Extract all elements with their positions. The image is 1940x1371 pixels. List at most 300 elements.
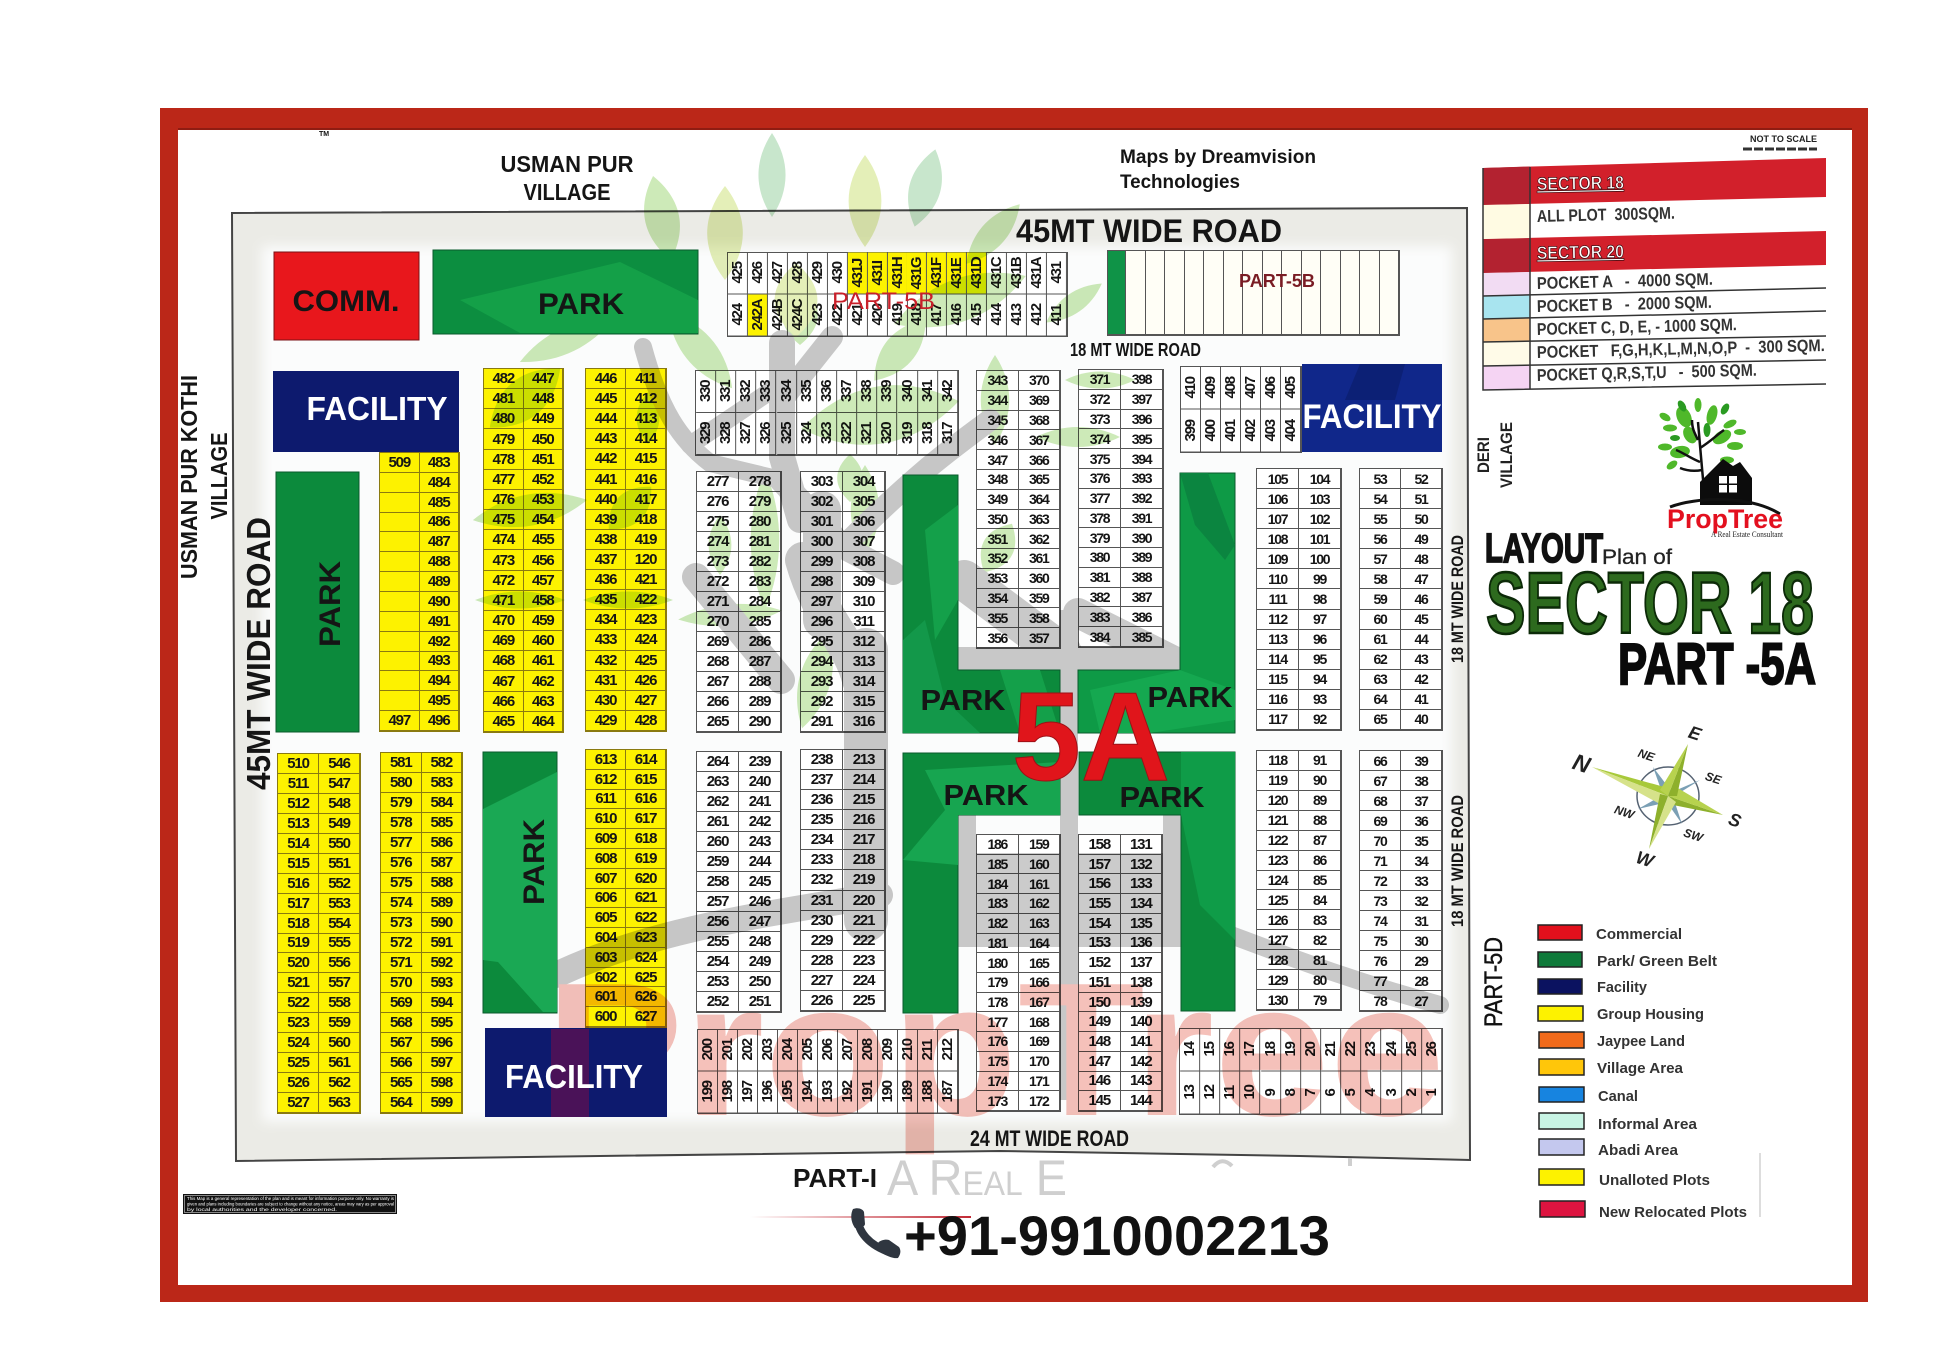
plots 343-370 block: 346 [988, 432, 1007, 448]
plots 424-431 row block: 431B [1008, 258, 1025, 289]
yellow plots 411-446 block: 436 [595, 571, 616, 588]
plots 343-370 block: 351 [988, 531, 1007, 547]
plots 291-316 block: 308 [853, 553, 874, 570]
plots 265-290 block: 271 [707, 593, 728, 610]
yellow plots 564-599 block: 574 [390, 894, 411, 911]
plots 27-78 block: 36 [1414, 812, 1427, 828]
plots 213-238 block: 237 [811, 771, 832, 788]
plots 27-78 block: 66 [1374, 752, 1386, 768]
label: Part-5D: PART-5D [1480, 937, 1508, 1027]
plots 213-238 block: 230 [811, 912, 832, 929]
plots 424-431 row block: 422 [829, 304, 846, 325]
plots 187-212 block: 203 [759, 1040, 776, 1061]
yellow plots 564-599 block: 576 [390, 854, 411, 871]
yellow plots 564-599 block: 588 [431, 874, 452, 891]
plots 265-290 block: 285 [749, 613, 770, 630]
plots 92-117 block: 103 [1310, 491, 1329, 507]
yellow plots 447-482 block: 469 [493, 632, 514, 649]
park: tall left [276, 472, 359, 732]
plots 213-238 block: 231 [811, 892, 832, 909]
sector label: 5A: 5A [1012, 666, 1170, 807]
plots 187-212 block: 190 [879, 1081, 896, 1102]
yellow plots 447-482 block: 447 [532, 370, 553, 387]
plots 92-117 block: 112 [1268, 611, 1287, 627]
yellow plots 411-446 block: 120 [635, 551, 656, 568]
land use legend [1538, 925, 1760, 1221]
plots 291-316 block: 295 [811, 633, 832, 650]
label: 18 MT wide road right lower: 18 MT WIDE ROAD [1448, 795, 1467, 927]
compass: S [1726, 809, 1744, 832]
yellow plots 447-482 block: 449 [532, 410, 553, 427]
yellow plots 510-563 block: 556 [328, 954, 350, 971]
plots 187-212 block: 202 [739, 1040, 756, 1061]
yellow plots 447-482 block: 450 [532, 431, 553, 448]
plots 239-264 block: 250 [749, 973, 770, 990]
plots 131-158 block: 146 [1089, 1072, 1110, 1089]
facility: top right: FACILITY [1302, 398, 1442, 436]
yellow plots 447-482 block: 462 [532, 673, 553, 690]
plots 40-65 block: 61 [1374, 631, 1386, 647]
plots 27-78 block: 30 [1414, 932, 1427, 948]
plots 27-78 block: 37 [1414, 792, 1427, 808]
title: layout plan of: LAYOUT [1485, 525, 1603, 571]
plots 159-186 block: 183 [988, 895, 1007, 911]
plots 317-342 block: 319 [899, 423, 916, 444]
yellow plots 510-563 block: 526 [287, 1074, 309, 1091]
plots 40-65 block: 45 [1414, 611, 1427, 627]
plots 239-264 block: 253 [707, 973, 728, 990]
plots 343-370 block: 345 [988, 412, 1007, 428]
yellow plots 483-509 block [379, 452, 460, 732]
plots 92-117 block: 108 [1268, 531, 1287, 547]
plots 265-290 block: 272 [707, 573, 728, 590]
yellow plots 447-482 block: 459 [532, 612, 553, 629]
yellow plots 483-509 block: 484 [428, 474, 449, 491]
plots 371-398 block: 389 [1132, 549, 1151, 565]
yellow plots 600-627 block: 607 [595, 870, 616, 887]
plots 291-316 block: 309 [853, 573, 874, 590]
plots 291-316 block: 311 [853, 613, 874, 630]
plots 92-117 block: 105 [1268, 471, 1287, 487]
plots 159-186 block: 173 [988, 1093, 1007, 1109]
plots 79-130 block: 81 [1313, 952, 1326, 968]
yellow plots 447-482 block: 481 [493, 390, 514, 407]
plots 159-186 block: 186 [988, 836, 1007, 852]
plots 265-290 block: 278 [749, 473, 770, 490]
yellow plots 510-563 block: 561 [328, 1054, 350, 1071]
plots 79-130 block: 87 [1313, 832, 1326, 848]
yellow plots 510-563 block: 551 [328, 855, 350, 872]
plots 291-316 block: 302 [811, 493, 832, 510]
label: Usman Pur Kothi Village: USMAN PUR KOTHI [176, 375, 202, 579]
yellow plots 564-599 block: 570 [390, 974, 411, 991]
plots 317-342 block: 322 [838, 423, 855, 444]
yellow plots 411-446 block: 441 [595, 471, 616, 488]
yellow plots 510-563 block: 555 [328, 934, 350, 951]
plots 213-238 block: 213 [853, 751, 874, 768]
disclaimer box: This Map is a general representation of the plan and is meant for information purpose only. No warranty is [187, 1196, 395, 1201]
plots 399-410 block: 406 [1262, 377, 1279, 398]
park: top [433, 250, 698, 334]
yellow plots 411-446 block: 423 [635, 611, 656, 628]
land use legend: Park/ Green Belt [1597, 953, 1717, 970]
park: upper right H: PARK [1148, 682, 1233, 714]
plots 40-65 block: 51 [1414, 491, 1427, 507]
plots 213-238 block: 235 [811, 811, 832, 828]
yellow plots 510-563 block: 520 [287, 954, 309, 971]
yellow plots 510-563 block: 513 [287, 815, 309, 832]
plots 343-370 block: 344 [988, 392, 1007, 408]
yellow plots 411-446 block: 444 [595, 410, 616, 427]
plots 424-431 row block: 424B [769, 299, 786, 330]
yellow plots 447-482 block: 463 [532, 693, 553, 710]
yellow plots 564-599 block: 578 [390, 814, 411, 831]
yellow plots 483-509 block: 492 [428, 633, 449, 650]
yellow plots 600-627 block: 622 [635, 909, 656, 926]
plots 79-130 block [1256, 750, 1342, 1011]
yellow plots 411-446 block: 415 [635, 450, 656, 467]
facility: top left [273, 371, 459, 452]
plots 343-370 block: 370 [1029, 372, 1048, 388]
plots 317-342 block: 337 [838, 381, 855, 402]
plots 371-398 block: 386 [1132, 609, 1151, 625]
yellow plots 411-446 block: 417 [635, 491, 656, 508]
yellow plots 600-627 block: 612 [595, 771, 616, 788]
plots 317-342 block: 321 [858, 423, 875, 444]
yellow plots 411-446 block: 424 [635, 631, 656, 648]
land use legend: Village Area [1597, 1060, 1684, 1077]
plots 79-130 block: 122 [1268, 832, 1287, 848]
plots 343-370 block: 366 [1029, 452, 1048, 468]
plots 291-316 block: 305 [853, 493, 874, 510]
plots 187-212 block [697, 1029, 959, 1114]
plots 27-78 block: 38 [1414, 772, 1427, 788]
plots 1-26 block: 18 [1262, 1043, 1279, 1057]
plots 291-316 block: 294 [811, 653, 832, 670]
plots 265-290 block: 277 [707, 473, 728, 490]
label: Usman Pur Village: USMAN PUR [500, 151, 634, 177]
plots 371-398 block: 385 [1132, 629, 1151, 645]
plots 159-186 block: 160 [1029, 856, 1048, 872]
facility: bottom [485, 1028, 667, 1117]
plot size table: SECTOR 20 [1537, 241, 1624, 263]
plots 317-342 block: 324 [798, 423, 815, 444]
plots 159-186 block: 163 [1029, 915, 1048, 931]
plots 131-158 block: 142 [1130, 1053, 1151, 1070]
yellow plots 564-599 block [380, 752, 463, 1114]
plots 1-26 block [1179, 1028, 1443, 1115]
park: middle: PARK [518, 819, 551, 905]
yellow plots 447-482 block: 479 [493, 431, 514, 448]
plots 291-316 block: 291 [811, 713, 832, 730]
plots 187-212 block: 204 [779, 1040, 796, 1061]
plots 79-130 block: 90 [1313, 772, 1326, 788]
yellow plots 510-563 block: 546 [328, 755, 350, 772]
plots 27-78 block: 35 [1414, 832, 1427, 848]
label: Usman Pur Village: VILLAGE [524, 179, 610, 205]
plots 291-316 block: 304 [853, 473, 874, 490]
plots 187-212 block: 197 [739, 1081, 756, 1102]
yellow plots 411-446 block [585, 368, 667, 732]
plots 1-26 block: 6 [1322, 1089, 1339, 1096]
plots 239-264 block: 251 [749, 993, 770, 1010]
plots 79-130 block: 130 [1268, 992, 1287, 1008]
plots 265-290 block: 287 [749, 653, 770, 670]
yellow plots 411-446 block: 432 [595, 652, 616, 669]
plots 187-212 block: 200 [699, 1040, 716, 1061]
plots 1-26 block: 16 [1221, 1043, 1238, 1057]
yellow plots 564-599 block: 595 [431, 1014, 452, 1031]
yellow plots 411-446 block: 416 [635, 471, 656, 488]
plots 371-398 block: 388 [1132, 569, 1151, 585]
plots 159-186 block: 184 [988, 876, 1007, 892]
plots 317-342 block: 329 [697, 423, 714, 444]
yellow plots 447-482 block: 475 [493, 511, 514, 528]
plots 1-26 block: 17 [1242, 1043, 1259, 1057]
plots 265-290 block: 279 [749, 493, 770, 510]
plots 239-264 block: 246 [749, 893, 770, 910]
label: PART-5B right: PART-5B [1239, 271, 1315, 291]
yellow plots 564-599 block: 568 [390, 1014, 411, 1031]
plots 27-78 block: 31 [1414, 912, 1427, 928]
plots 40-65 block: 40 [1414, 711, 1427, 727]
yellow plots 411-446 block: 413 [635, 410, 656, 427]
yellow plots 447-482 block: 473 [493, 552, 514, 569]
yellow plots 447-482 block: 470 [493, 612, 514, 629]
yellow plots 483-509 block: 497 [389, 712, 410, 729]
plots 92-117 block: 110 [1268, 571, 1287, 587]
plots 239-264 block: 248 [749, 933, 770, 950]
plots 159-186 block: 165 [1029, 955, 1048, 971]
land use legend: Facility [1597, 979, 1648, 996]
yellow plots 447-482 block: 460 [532, 632, 553, 649]
plots 239-264 block: 262 [707, 793, 728, 810]
yellow plots 447-482 block: 464 [532, 713, 553, 730]
plots 1-26 block: 23 [1362, 1043, 1379, 1057]
label: 45MT wide road left: 45MT WIDE ROAD [240, 517, 277, 790]
yellow plots 510-563 block: 524 [287, 1034, 309, 1051]
plots 159-186 block: 169 [1029, 1033, 1048, 1049]
plots 371-398 block: 379 [1090, 530, 1109, 546]
plot size table: POCKET F,G,H,K,L,M,N,O,P - 300 SQM. [1537, 336, 1825, 362]
yellow plots 483-509 block: 491 [428, 613, 449, 630]
plots 92-117 block: 97 [1313, 611, 1326, 627]
proptree logo [1658, 398, 1784, 539]
yellow plots 510-563 block [277, 753, 361, 1114]
plots 424-431 row block: 431A [1028, 258, 1045, 289]
plots 371-398 block: 393 [1132, 470, 1151, 486]
land use legend: Commercial [1596, 926, 1682, 943]
yellow plots 447-482 block: 466 [493, 693, 514, 710]
yellow plots 483-509 block: 495 [428, 692, 449, 709]
plots 239-264 block: 249 [749, 953, 770, 970]
title: part -5A: PART -5A [1618, 632, 1816, 697]
plots 239-264 block: 240 [749, 773, 770, 790]
land use legend: Informal Area [1598, 1116, 1698, 1133]
plots 131-158 block: 133 [1130, 875, 1151, 892]
yellow plots 411-446 block: 434 [595, 611, 616, 628]
plots 371-398 block: 380 [1090, 549, 1109, 565]
plots 131-158 block: 143 [1130, 1072, 1151, 1089]
yellow plots 510-563 block: 517 [287, 895, 309, 912]
plots 239-264 block: 254 [707, 953, 728, 970]
plots 131-158 block: 136 [1130, 934, 1151, 951]
yellow plots 411-446 block: 446 [595, 370, 616, 387]
plots 27-78 block: 77 [1374, 972, 1386, 988]
park: lower right H: PARK [1120, 782, 1205, 814]
plots 291-316 block: 292 [811, 693, 832, 710]
plots 92-117 block: 95 [1313, 651, 1326, 667]
plots 424-431 row block: 418 [908, 304, 925, 325]
yellow plots 411-446 block: 442 [595, 450, 616, 467]
plots 159-186 block: 178 [988, 994, 1007, 1010]
plots 79-130 block: 86 [1313, 852, 1326, 868]
plots 159-186 block: 175 [988, 1053, 1007, 1069]
plots 399-410 block: 403 [1262, 420, 1279, 441]
yellow plots 564-599 block: 593 [431, 974, 452, 991]
plots 424-431 row block: 242A [749, 299, 766, 330]
plots 399-410 block: 402 [1242, 420, 1259, 441]
label: 18 MT wide road right upper: 18 MT WIDE ROAD [1448, 535, 1467, 663]
yellow plots 510-563 block: 523 [287, 1014, 309, 1031]
plots 1-26 block: 4 [1362, 1089, 1379, 1096]
yellow plots 510-563 block: 525 [287, 1054, 309, 1071]
plots 92-117 block: 102 [1310, 511, 1329, 527]
plots 159-186 block: 167 [1029, 994, 1048, 1010]
plots 291-316 block: 316 [853, 713, 874, 730]
yellow plots 564-599 block: 566 [390, 1054, 411, 1071]
trademark mark: TM [319, 131, 329, 138]
plots 343-370 block: 347 [988, 452, 1007, 468]
yellow plots 600-627 block: 621 [635, 889, 656, 906]
yellow plots 600-627 block: 625 [635, 969, 656, 986]
plots 371-398 block: 377 [1090, 490, 1109, 506]
plots 187-212 block: 191 [859, 1081, 876, 1102]
plots 213-238 block [800, 749, 886, 1012]
plots 159-186 block: 166 [1029, 974, 1048, 990]
yellow plots 447-482 block: 468 [493, 652, 514, 669]
plots 1-26 block: 21 [1322, 1043, 1339, 1057]
plots 1-26 block: 26 [1423, 1043, 1440, 1057]
plots 131-158 block: 154 [1089, 915, 1110, 932]
plots 187-212 block: 207 [839, 1040, 856, 1061]
plots 317-342 block: 330 [697, 381, 714, 402]
plots 27-78 block: 69 [1374, 812, 1386, 828]
plots 424-431 row block: 420 [869, 304, 886, 325]
plots 159-186 block: 162 [1029, 895, 1048, 911]
plots 371-398 block: 395 [1132, 431, 1151, 447]
plots 40-65 block: 47 [1414, 571, 1427, 587]
plots 79-130 block: 120 [1268, 792, 1287, 808]
yellow plots 447-482 block: 467 [493, 673, 514, 690]
plots 27-78 block: 39 [1414, 752, 1427, 768]
plots 265-290 block: 289 [749, 693, 770, 710]
disclaimer box [183, 1194, 397, 1214]
plots 92-117 block: 115 [1268, 671, 1287, 687]
plots 40-65 block: 52 [1414, 471, 1427, 487]
plots 79-130 block: 124 [1268, 872, 1287, 888]
plots 27-78 block: 78 [1374, 992, 1386, 1008]
plots 92-117 block: 107 [1268, 511, 1287, 527]
plots 213-238 block: 229 [811, 932, 832, 949]
plots 40-65 block: 60 [1374, 611, 1386, 627]
plots 1-26 block: 1 [1423, 1089, 1440, 1096]
yellow plots 564-599 block: 575 [390, 874, 411, 891]
plots 79-130 block: 89 [1313, 792, 1326, 808]
plots 131-158 block: 145 [1089, 1092, 1110, 1109]
compass: SW [1682, 826, 1706, 845]
yellow plots 600-627 block: 613 [595, 751, 616, 768]
plots 317-342 block: 332 [737, 381, 754, 402]
plots 92-117 block: 94 [1313, 671, 1326, 687]
yellow plots 447-482 block: 452 [532, 471, 553, 488]
plots 424-431 row block: 424C [789, 299, 806, 330]
plots 79-130 block: 79 [1313, 992, 1326, 1008]
plots 131-158 block: 147 [1089, 1053, 1110, 1070]
plots 92-117 block: 106 [1268, 491, 1287, 507]
plots 424-431 row block: 421 [849, 304, 866, 325]
plots 159-186 block: 168 [1029, 1014, 1048, 1030]
compass: N [1570, 748, 1594, 778]
plot size table: POCKET C, D, E, - 1000 SQM. [1537, 315, 1737, 339]
plots 317-342 block: 320 [878, 423, 895, 444]
plots 40-65 block [1359, 468, 1443, 731]
plots 159-186 block: 161 [1029, 876, 1048, 892]
park: lower left H: PARK [944, 780, 1029, 812]
plots 131-158 block: 139 [1130, 994, 1151, 1011]
plots 92-117 block: 98 [1313, 591, 1326, 607]
plots 159-186 block: 171 [1029, 1073, 1048, 1089]
yellow plots 411-446 block: 412 [635, 390, 656, 407]
yellow plots 510-563 block: 515 [287, 855, 309, 872]
yellow plots 510-563 block: 521 [287, 974, 309, 991]
yellow plots 510-563 block: 511 [288, 775, 308, 792]
yellow plots 564-599 block: 567 [390, 1034, 411, 1051]
label: Usman Pur Kothi Village [176, 375, 232, 579]
plots 424-431 row block: 429 [809, 263, 826, 284]
yellow plots 447-482 block: 476 [493, 491, 514, 508]
yellow plots 564-599 block: 571 [390, 954, 411, 971]
yellow plots 411-446 block: 438 [595, 531, 616, 548]
disclaimer box: by local authorities and the developer concerned. [187, 1207, 337, 1212]
plots 40-65 block: 43 [1414, 651, 1427, 667]
plots 424-431 row block: 428 [789, 263, 806, 284]
plots 371-398 block: 397 [1132, 391, 1151, 407]
yellow plots 600-627 block: 624 [635, 949, 656, 966]
plots 79-130 block: 118 [1268, 752, 1287, 768]
plots 159-186 block: 164 [1029, 935, 1048, 951]
plots 399-410 block: 405 [1282, 377, 1299, 398]
label: Deri Village: VILLAGE [1497, 422, 1516, 488]
yellow plots 600-627 block: 615 [635, 771, 656, 788]
yellow plots 600-627 block: 600 [595, 1008, 616, 1025]
plots 213-238 block: 227 [811, 972, 832, 989]
plot size table [1483, 158, 1826, 390]
plots 213-238 block: 224 [853, 972, 874, 989]
yellow plots 411-446 block: 419 [635, 531, 656, 548]
yellow plots 600-627 block: 603 [595, 949, 616, 966]
plots 27-78 block: 73 [1374, 892, 1386, 908]
plots 27-78 block: 67 [1374, 772, 1386, 788]
plots 265-290 block: 274 [707, 533, 728, 550]
yellow plots 510-563 block: 527 [287, 1094, 309, 1111]
yellow plots 564-599 block: 577 [390, 834, 411, 851]
plots 131-158 block: 144 [1130, 1092, 1151, 1109]
plots 187-212 block: 187 [939, 1081, 956, 1102]
plots 291-316 block: 298 [811, 573, 832, 590]
plots 1-26 block: 8 [1282, 1089, 1299, 1096]
plots 424-431 row block: 415 [968, 304, 985, 325]
